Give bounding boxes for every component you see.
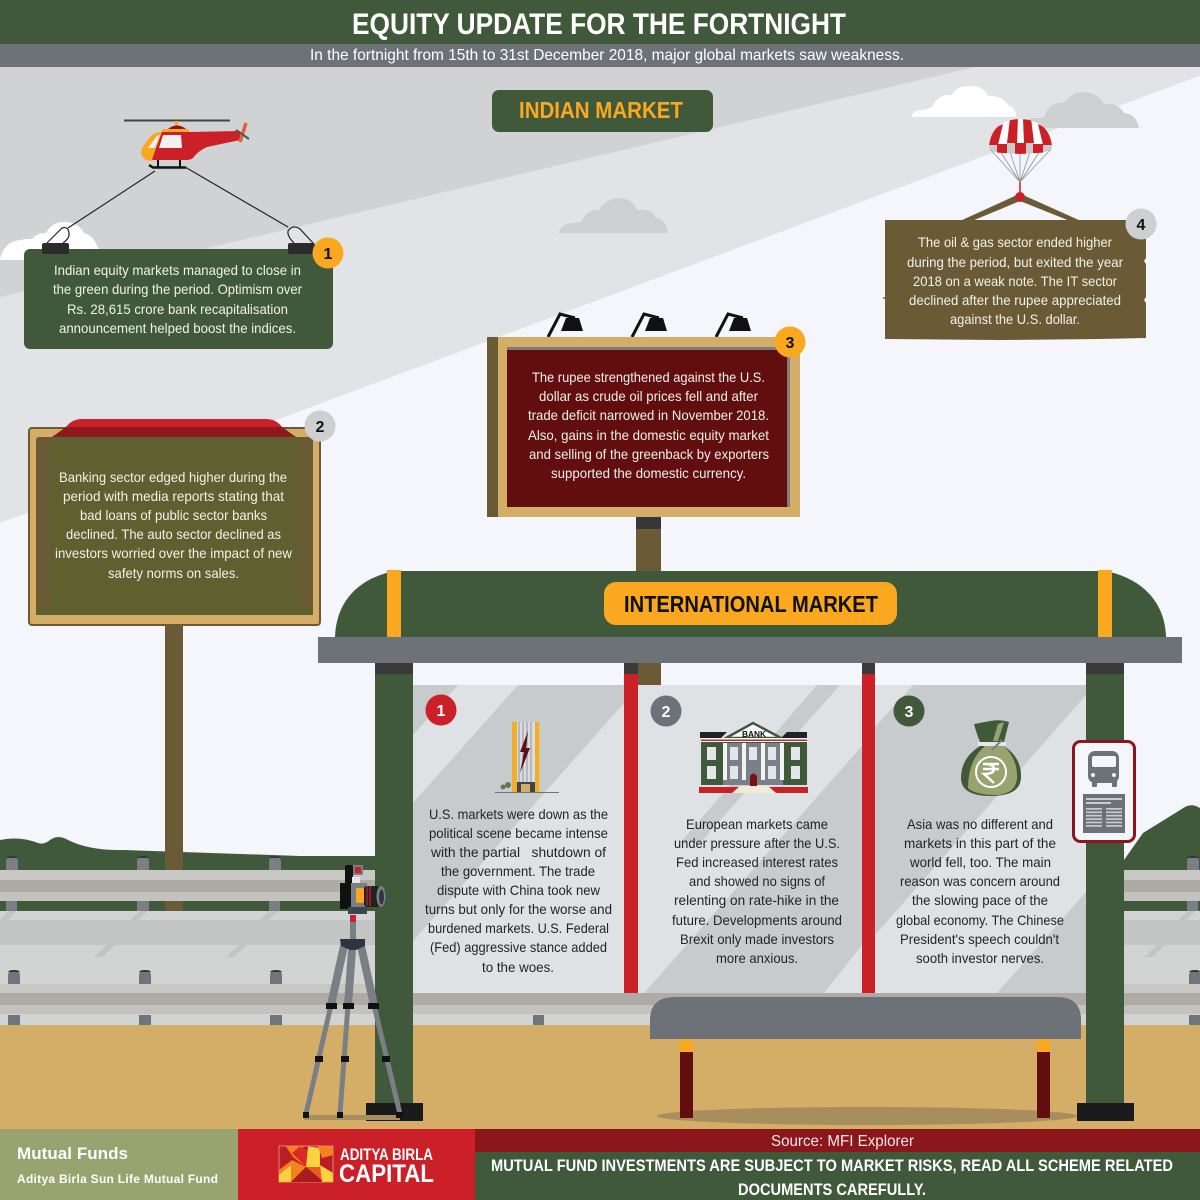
panel: international column 1: political scene became intense: [429, 825, 608, 841]
footer: disclaimer: DOCUMENTS CAREFULLY.: [738, 1180, 926, 1199]
footer: source: [475, 1129, 1200, 1152]
panel: international column 3: [894, 696, 1064, 966]
panel: international column 2: and showed no signs of: [689, 873, 825, 889]
icon: helicopter: [124, 120, 249, 168]
panel: international column 2: Fed increased interest rates: [676, 854, 838, 870]
panel: indian market 4 sign: The oil & gas sector ended higher: [918, 234, 1112, 250]
panel: indian market 2 billboard: 2: [316, 419, 325, 436]
panel: international column 2: Brexit only made investors: [680, 931, 834, 947]
icon: skyscraper with crack: [495, 722, 559, 792]
panel: indian market 4 sign: during the period, but exited the year: [907, 254, 1123, 270]
footer: aditya birla capital logo: ADITYA BIRLA: [340, 1145, 433, 1164]
panel: international column 1: turns but only for the worse and: [425, 901, 612, 917]
panel: international column 3: President's speech couldn't: [900, 931, 1059, 947]
panel: indian market 1: Rs. 28,615 crore bank recapitalisation: [67, 301, 288, 317]
icon: money bag: [961, 720, 1021, 796]
header: title: EQUITY UPDATE FOR THE FORTNIGHT: [352, 8, 846, 41]
panel: indian market 3 billboard: dollar as crude oil prices fell and after: [539, 388, 758, 404]
header: subtitle: [0, 44, 1200, 67]
footer: mutual funds: Aditya Birla Sun Life Mutual Fund: [17, 1172, 218, 1186]
panel: international column 1: U.S. markets were down as the: [429, 806, 608, 822]
panel: indian market 3 billboard: 3: [786, 335, 795, 352]
panel: international column 3: the slowing pace of the: [912, 892, 1048, 908]
panel: indian market 2 billboard: Banking sector edged higher during the: [59, 469, 287, 485]
panel: indian market 2 billboard: declined. The auto sector declined as: [66, 526, 281, 542]
footer: source: Source: MFI Explorer: [771, 1133, 915, 1150]
panel: international column 2: under pressure after the U.S.: [674, 835, 840, 851]
panel: international column 1: burdened markets. U.S. Federal: [428, 920, 609, 936]
panel: indian market 1: 1: [324, 246, 333, 263]
panel: international column 2: future. Developments around: [672, 912, 842, 928]
panel: indian market 3 billboard: The rupee strengthened against the U.S.: [532, 369, 765, 385]
footer: mutual funds: [0, 1129, 238, 1200]
panel: international column 1: (Fed) aggressive stance added: [430, 939, 607, 955]
panel: indian market 1: Indian equity markets managed to close in: [54, 262, 301, 278]
panel: indian market 3 billboard: supported the domestic currency.: [551, 465, 746, 481]
panel: indian market 3 billboard: and selling of the greenback by exporters: [529, 446, 769, 462]
panel: indian market 4 sign: 4: [1137, 217, 1146, 234]
panel: international column 3: markets in this part of the: [904, 835, 1056, 851]
footer: disclaimer: [475, 1152, 1200, 1200]
helicopter cables: [47, 167, 313, 243]
panel: indian market 2 billboard: [29, 410, 336, 625]
panel: indian market 2 billboard: period with media reports stating that: [63, 488, 284, 504]
clouds: [0, 86, 1139, 260]
panel: indian market 1: announcement helped boost the indices.: [59, 320, 296, 336]
panel: indian market 3 billboard: Also, gains in the domestic equity market: [528, 427, 769, 443]
panel: international market background: [413, 685, 1086, 993]
panel: international column 2: relenting on rate-hike in the: [674, 892, 839, 908]
panel: international column 2: more anxious.: [716, 950, 798, 966]
panel: indian market 3 billboard: [487, 314, 806, 517]
panel: indian market 4 sign: against the U.S. dollar.: [950, 311, 1080, 327]
hills and road barrier: [0, 625, 1200, 1025]
header: title: [0, 0, 1200, 44]
icon: camera on tripod: [303, 865, 403, 1120]
panel: international column 3: global economy. The Chinese: [896, 912, 1064, 928]
billboard 2 post: [165, 625, 183, 911]
heading: international market: INTERNATIONAL MARKET: [624, 591, 878, 617]
panel: international column 1: with the partial shutdown of: [430, 844, 606, 860]
panel: indian market 4 sign: declined after the rupee appreciated: [909, 292, 1121, 308]
panel: international column 2: European markets came: [686, 816, 828, 832]
panel: international column 3: Asia was no different and: [907, 816, 1053, 832]
panel: international column 2: 2: [662, 704, 671, 721]
ground: [0, 1025, 1200, 1129]
footer: aditya birla capital logo: CAPITAL: [339, 1160, 434, 1188]
footer: aditya birla capital logo: [238, 1129, 475, 1200]
panel: international column 3: world fell, too. The main: [909, 854, 1051, 870]
panel: indian market 1: the green during the period. Optimism over: [53, 281, 302, 297]
panel: international column 1: [425, 694, 612, 975]
panel: international column 1: to the woes.: [482, 959, 554, 975]
panel: international column 2: [650, 696, 842, 966]
panel: international column 1: dispute with China took new: [437, 882, 601, 898]
panel: international column 3: 3: [905, 704, 914, 721]
bench: [650, 997, 1081, 1125]
panel: international column 3: reason was concern around: [900, 873, 1060, 889]
panel: indian market 2 billboard: safety norms on sales.: [108, 565, 239, 581]
panel: international column 1: the government. The trade: [441, 863, 595, 879]
panel: international column 1: 1: [437, 703, 446, 720]
panel: indian market 3 billboard: trade deficit narrowed in November 2018.: [528, 407, 769, 423]
heading: international market: [604, 582, 897, 625]
icon: parachute: [989, 119, 1052, 192]
icon: bank: [699, 723, 808, 793]
panel: international column 3: sooth investor nerves.: [916, 950, 1044, 966]
header: subtitle: In the fortnight from 15th to 31st December 2018, major global markets saw weakness.: [310, 47, 904, 64]
billboard 3 post: [636, 517, 661, 685]
heading: indian market: INDIAN MARKET: [519, 97, 683, 123]
icon: bank: BANK: [742, 730, 766, 739]
panel: indian market 1: [24, 238, 344, 349]
footer: mutual funds: Mutual Funds: [17, 1144, 128, 1163]
icon: bus stop sign: [1074, 742, 1134, 842]
panel: indian market 2 billboard: bad loans of public sector banks: [80, 507, 267, 523]
panel: indian market 2 billboard: investors worried over the impact of new: [55, 545, 293, 561]
panel: indian market 4 sign: 2018 on a weak note. The IT sector: [913, 273, 1117, 289]
panel: indian market 4 sign: [882, 192, 1156, 340]
bus shelter: [318, 570, 1182, 1121]
heading: indian market: [492, 90, 713, 132]
